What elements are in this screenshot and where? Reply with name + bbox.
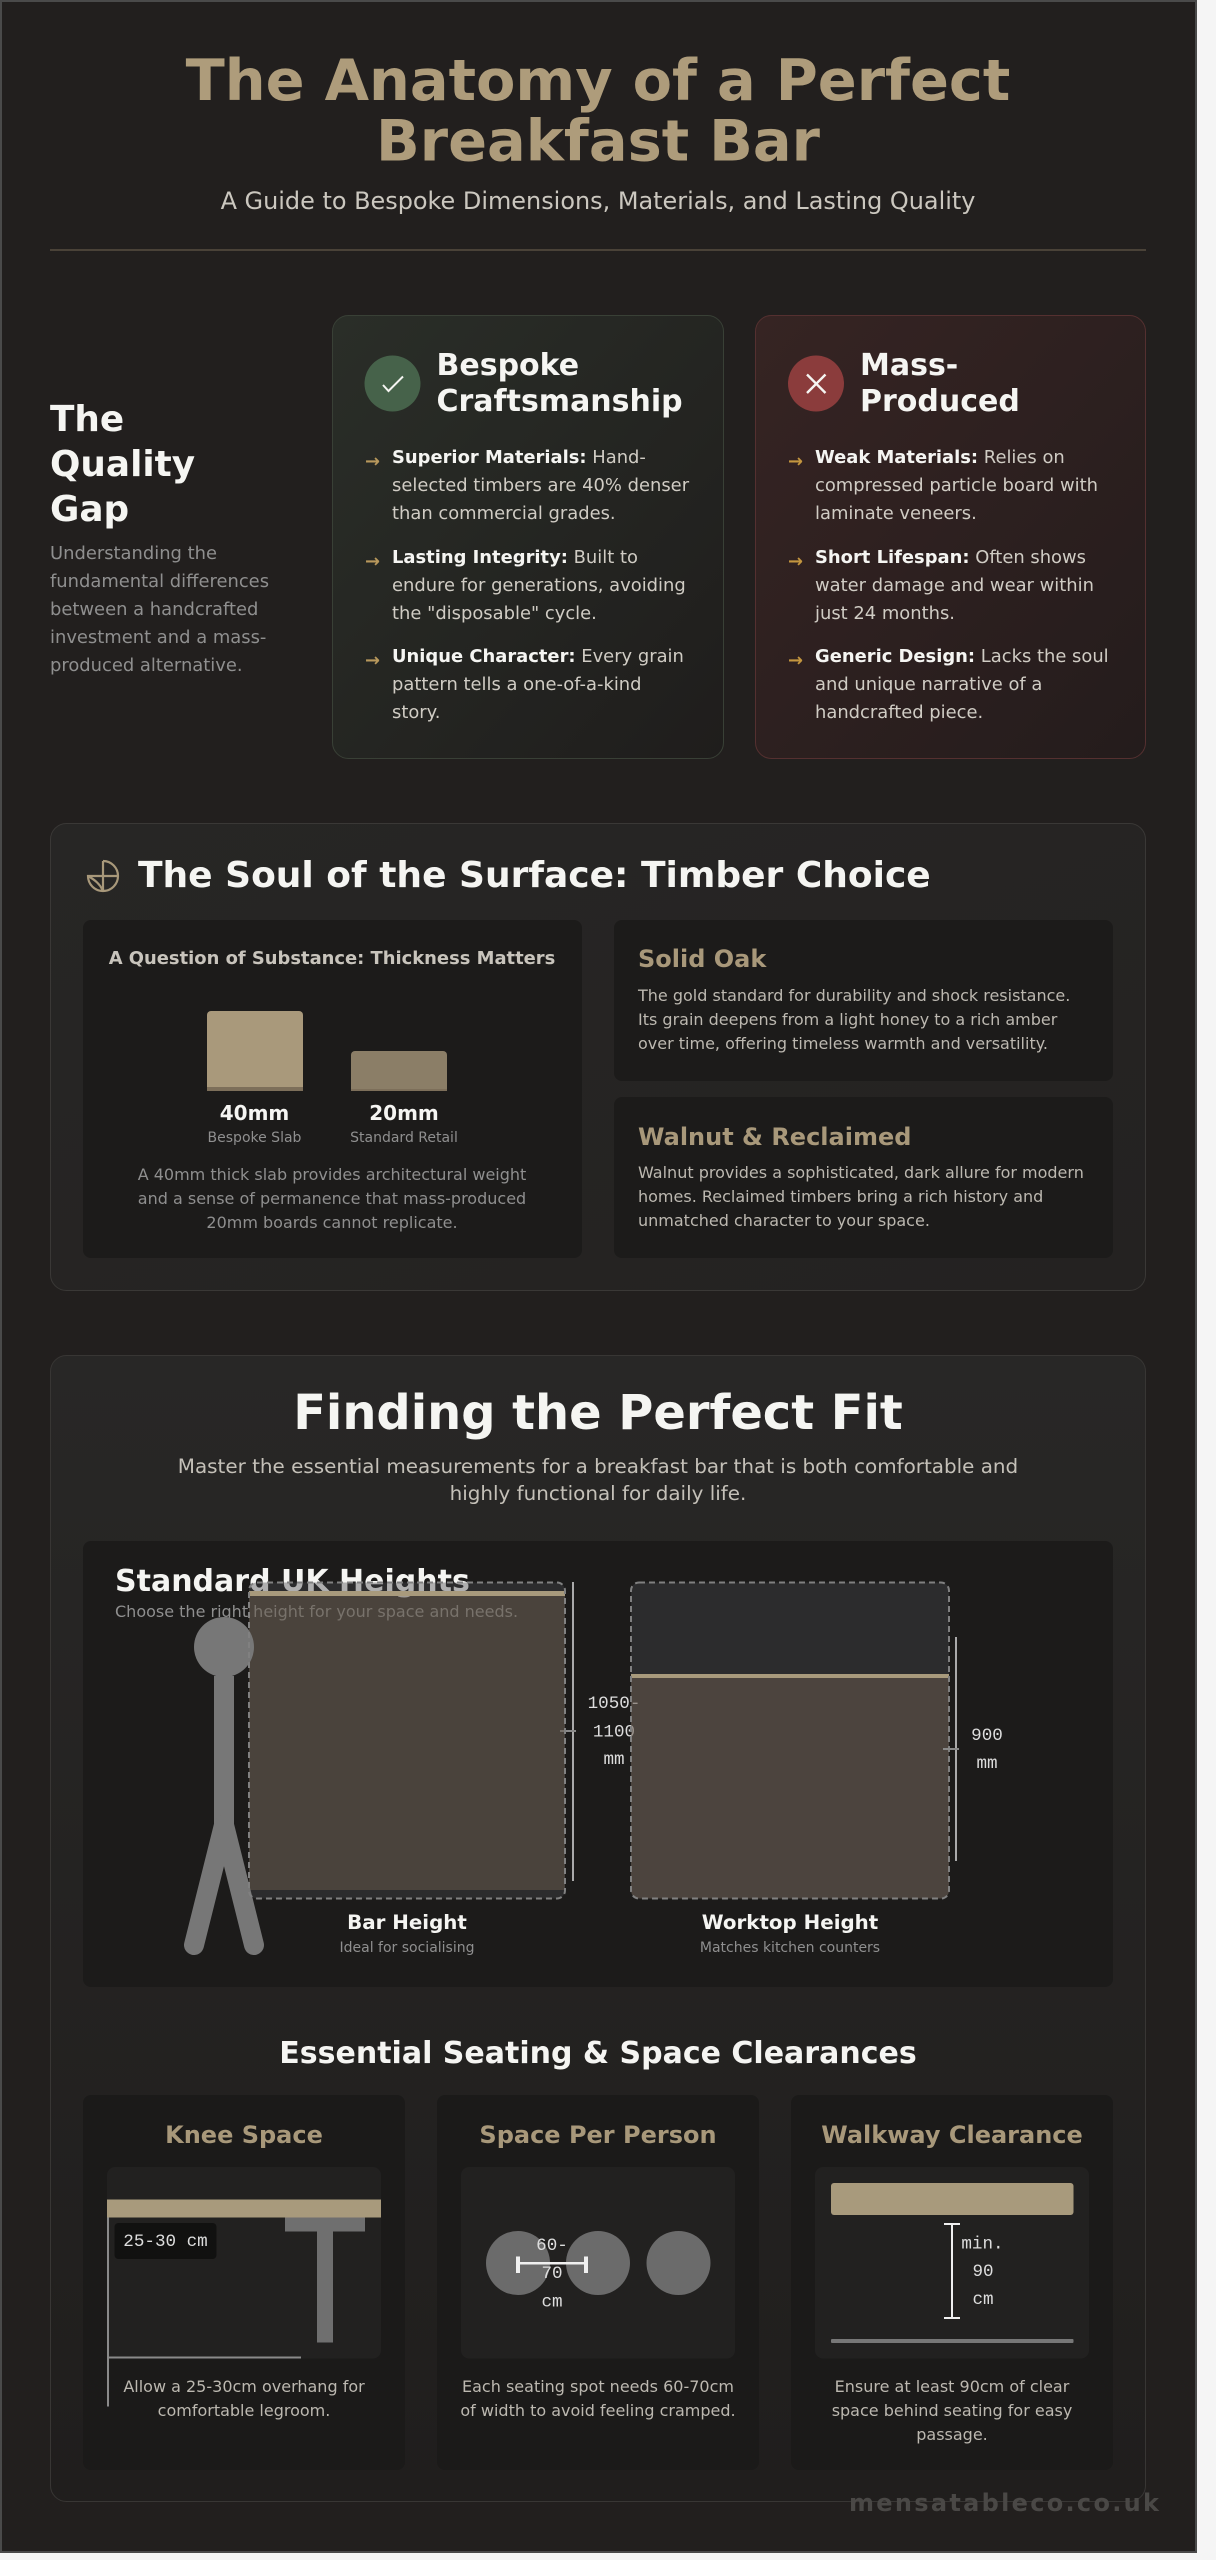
intro text: fit: Master the essential measurements for a breakfast bar that is both comfortable and: [178, 1455, 1018, 1478]
list item: lasting integrity: Lasting Integrity: Built to: [392, 547, 638, 568]
card: walnut and reclaimed: Walnut provides a sophisticated, dark allure for modern: [638, 1163, 1084, 1182]
intro text: fundamental differences: [50, 571, 269, 592]
heading: thickness matters: A Question of Substance: Thickness Matters: [109, 948, 555, 969]
heading: standard uk heights: Standard UK Heights: [115, 1564, 470, 1599]
card: space per person: Each seating spot needs 60-70cm: [462, 2377, 734, 2396]
heading: bespoke craftsmanship: [436, 348, 683, 419]
list item: short lifespan: [788, 547, 1094, 624]
intro text: produced alternative.: [50, 655, 243, 676]
intro text: investment and a mass-: [50, 627, 266, 648]
label: 20mm: Standard Retail: [350, 1130, 458, 1146]
list item: weak materials: [788, 447, 1098, 524]
label: worktop height: Worktop Height: [702, 1911, 879, 1934]
diagram: walkway clearance: 90: [972, 2262, 994, 2282]
diagram: walkway clearance: min.: [961, 2234, 1004, 2254]
diagram: walkway clearance: cm: [972, 2290, 994, 2310]
list item: superior materials: than commercial grades.: [392, 503, 616, 524]
panel: standard uk heights: [83, 1541, 1113, 1987]
label: 40mm: [208, 1101, 302, 1146]
watermark: mensatableco.co.uk: [849, 2489, 1161, 2517]
panel: timber choice: [50, 824, 1146, 1290]
panel: thickness comparison: [83, 920, 582, 1258]
diagram: walkway clearance: [815, 2167, 1089, 2358]
card: walkway clearance: Ensure at least 90cm of clear: [835, 2377, 1070, 2396]
label: bar height: [340, 1911, 474, 1956]
label: bar height: Ideal for socialising: [340, 1940, 474, 1956]
chart: 40mm slab: [207, 1011, 303, 1091]
card: knee space: Allow a 25-30cm overhang for: [123, 2377, 365, 2396]
label: worktop height: [700, 1911, 880, 1956]
label: bar height: Bar Height: [347, 1911, 467, 1934]
diagram: seating width: 60-: [536, 2236, 568, 2256]
icon: cross: [788, 356, 844, 412]
measurement: bar height value: mm: [603, 1750, 625, 1770]
heading: the quality gap: The: [50, 399, 124, 440]
card: solid oak: The gold standard for durability and shock resistance.: [637, 986, 1070, 1005]
list item: unique character: story.: [392, 702, 440, 723]
card: walnut and reclaimed: unmatched character to your space.: [638, 1211, 930, 1230]
thickness description: [138, 1165, 526, 1232]
title: Breakfast Bar: [376, 108, 821, 174]
label: worktop height: Matches kitchen counters: [700, 1940, 880, 1956]
label: 25-30 cm: 25-30 cm: [123, 2232, 208, 2252]
list item: short lifespan: →: [788, 551, 803, 572]
thickness description: 20mm boards cannot replicate.: [206, 1213, 458, 1232]
measurement: bar height value: 1100: [593, 1722, 635, 1742]
list item: superior materials: Superior Materials: Hand-: [392, 447, 646, 468]
card: walkway clearance: space behind seating for easy: [832, 2401, 1072, 2420]
list item: weak materials: Weak Materials: Relies on: [815, 447, 1065, 468]
list item: unique character: Unique Character: Every grain: [392, 646, 684, 667]
card: walnut and reclaimed: [614, 1097, 1113, 1258]
list item: short lifespan: just 24 months.: [814, 603, 955, 624]
intro text: Understanding the: [50, 543, 217, 564]
subtitle: A Guide to Bespoke Dimensions, Materials, and Lasting Quality: [221, 187, 975, 215]
card: solid oak: Solid Oak: [638, 945, 767, 973]
diagram: bar height cabinet: [194, 1582, 565, 1945]
panel: the quality gap intro: [50, 399, 269, 676]
heading: bespoke craftsmanship: Bespoke: [436, 348, 579, 383]
label: 20mm: [350, 1101, 458, 1146]
thickness description: and a sense of permanence that mass-produced: [138, 1189, 526, 1208]
diagram: worktop height cabinet: [631, 1582, 949, 1898]
list item: unique character: →: [365, 650, 380, 671]
list item: lasting integrity: [365, 547, 686, 624]
list item: superior materials: →: [365, 451, 380, 472]
list item: superior materials: selected timbers are 40% denser: [392, 475, 690, 496]
card: space per person: of width to avoid feeling cramped.: [460, 2401, 736, 2420]
thickness description: A 40mm thick slab provides architectural weight: [138, 1165, 526, 1184]
panel: finding the perfect fit: [50, 1356, 1146, 2502]
heading: timber choice: The Soul of the Surface: Timber Choice: [138, 855, 931, 896]
card: walkway clearance: Walkway Clearance: [821, 2121, 1083, 2149]
card: walkway clearance: [791, 2095, 1113, 2470]
card: walkway clearance: passage.: [916, 2425, 988, 2444]
diagram: seating width: cm: [541, 2292, 563, 2312]
header: [50, 47, 1146, 251]
measurement: bar height value: [560, 1582, 640, 1881]
card: space per person: [437, 2095, 759, 2470]
title: [186, 47, 1010, 174]
label: 40mm: Bespoke Slab: [208, 1130, 302, 1146]
list item: unique character: pattern tells a one-of-a-kind: [392, 674, 642, 695]
panel: mass-produced: [756, 316, 1146, 758]
icon: standing person: [194, 1617, 254, 1945]
list item: generic design: →: [788, 650, 803, 671]
list item: superior materials: [365, 447, 690, 524]
diagram: seating width: 70: [541, 2264, 563, 2284]
measurement: worktop height value: mm: [976, 1754, 998, 1774]
measurement: worktop height value: 900: [971, 1726, 1003, 1746]
card: space per person: Space Per Person: [479, 2121, 717, 2149]
label: 40mm: 40mm: [220, 1101, 289, 1125]
icon: timber section: [88, 861, 118, 891]
list item: short lifespan: water damage and wear within: [815, 575, 1094, 596]
list item: lasting integrity: →: [365, 551, 380, 572]
card: knee space: comfortable legroom.: [158, 2401, 330, 2420]
heading: seating and clearances: Essential Seating & Space Clearances: [279, 2036, 917, 2071]
list item: generic design: handcrafted piece.: [815, 702, 983, 723]
card: knee space: Knee Space: [165, 2121, 323, 2149]
icon: check mark: [364, 356, 420, 412]
label: 20mm: 20mm: [369, 1101, 439, 1125]
card: knee space: [83, 2095, 405, 2470]
card: walnut and reclaimed: Walnut & Reclaimed: [638, 1123, 911, 1151]
heading: the quality gap: Quality: [50, 444, 195, 485]
diagram: seating width: [461, 2167, 735, 2358]
list item: lasting integrity: the "disposable" cycle.: [392, 603, 597, 624]
list item: generic design: [788, 646, 1109, 723]
list item: lasting integrity: endure for generations, avoiding: [392, 575, 686, 596]
list item: weak materials: compressed particle board with: [815, 475, 1098, 496]
heading: mass-produced: Mass-: [860, 348, 958, 383]
card: walnut and reclaimed: homes. Reclaimed timbers bring a rich history and: [638, 1187, 1043, 1206]
card: solid oak: over time, offering timeless warmth and versatility.: [638, 1034, 1048, 1053]
chart: 20mm slab: [351, 1051, 447, 1091]
intro text: fit: highly functional for daily life.: [450, 1482, 746, 1505]
measurement: worktop height value: [943, 1637, 1003, 1861]
title: The Anatomy of a Perfect: [186, 47, 1010, 114]
intro text: between a handcrafted: [50, 599, 258, 620]
diagram: knee space: [107, 2167, 381, 2406]
heading: mass-produced: [860, 348, 1020, 419]
heading: the quality gap: [50, 399, 195, 530]
panel: bespoke craftsmanship: [332, 316, 724, 758]
list item: weak materials: laminate veneers.: [815, 503, 977, 524]
label: 25-30 cm: [114, 2223, 216, 2259]
subheading: heights: Choose the right height for your space and needs.: [115, 1602, 518, 1621]
list item: short lifespan: Short Lifespan: Often shows: [815, 547, 1086, 568]
list item: weak materials: →: [788, 451, 803, 472]
heading: bespoke craftsmanship: Craftsmanship: [436, 384, 683, 419]
card: solid oak: [614, 920, 1113, 1081]
list item: unique character: [365, 646, 684, 723]
heading: mass-produced: Produced: [860, 384, 1020, 419]
list item: generic design: and unique narrative of a: [815, 674, 1042, 695]
card: solid oak: Its grain deepens from a light honey to a rich amber: [638, 1010, 1058, 1029]
list item: generic design: Generic Design: Lacks the soul: [815, 646, 1109, 667]
heading: finding the perfect fit: Finding the Perfect Fit: [293, 1386, 903, 1441]
heading: the quality gap: Gap: [50, 489, 129, 530]
intro text: fit: [178, 1455, 1018, 1505]
intro text: [50, 543, 269, 676]
measurement: bar height value: 1050-: [588, 1694, 640, 1714]
